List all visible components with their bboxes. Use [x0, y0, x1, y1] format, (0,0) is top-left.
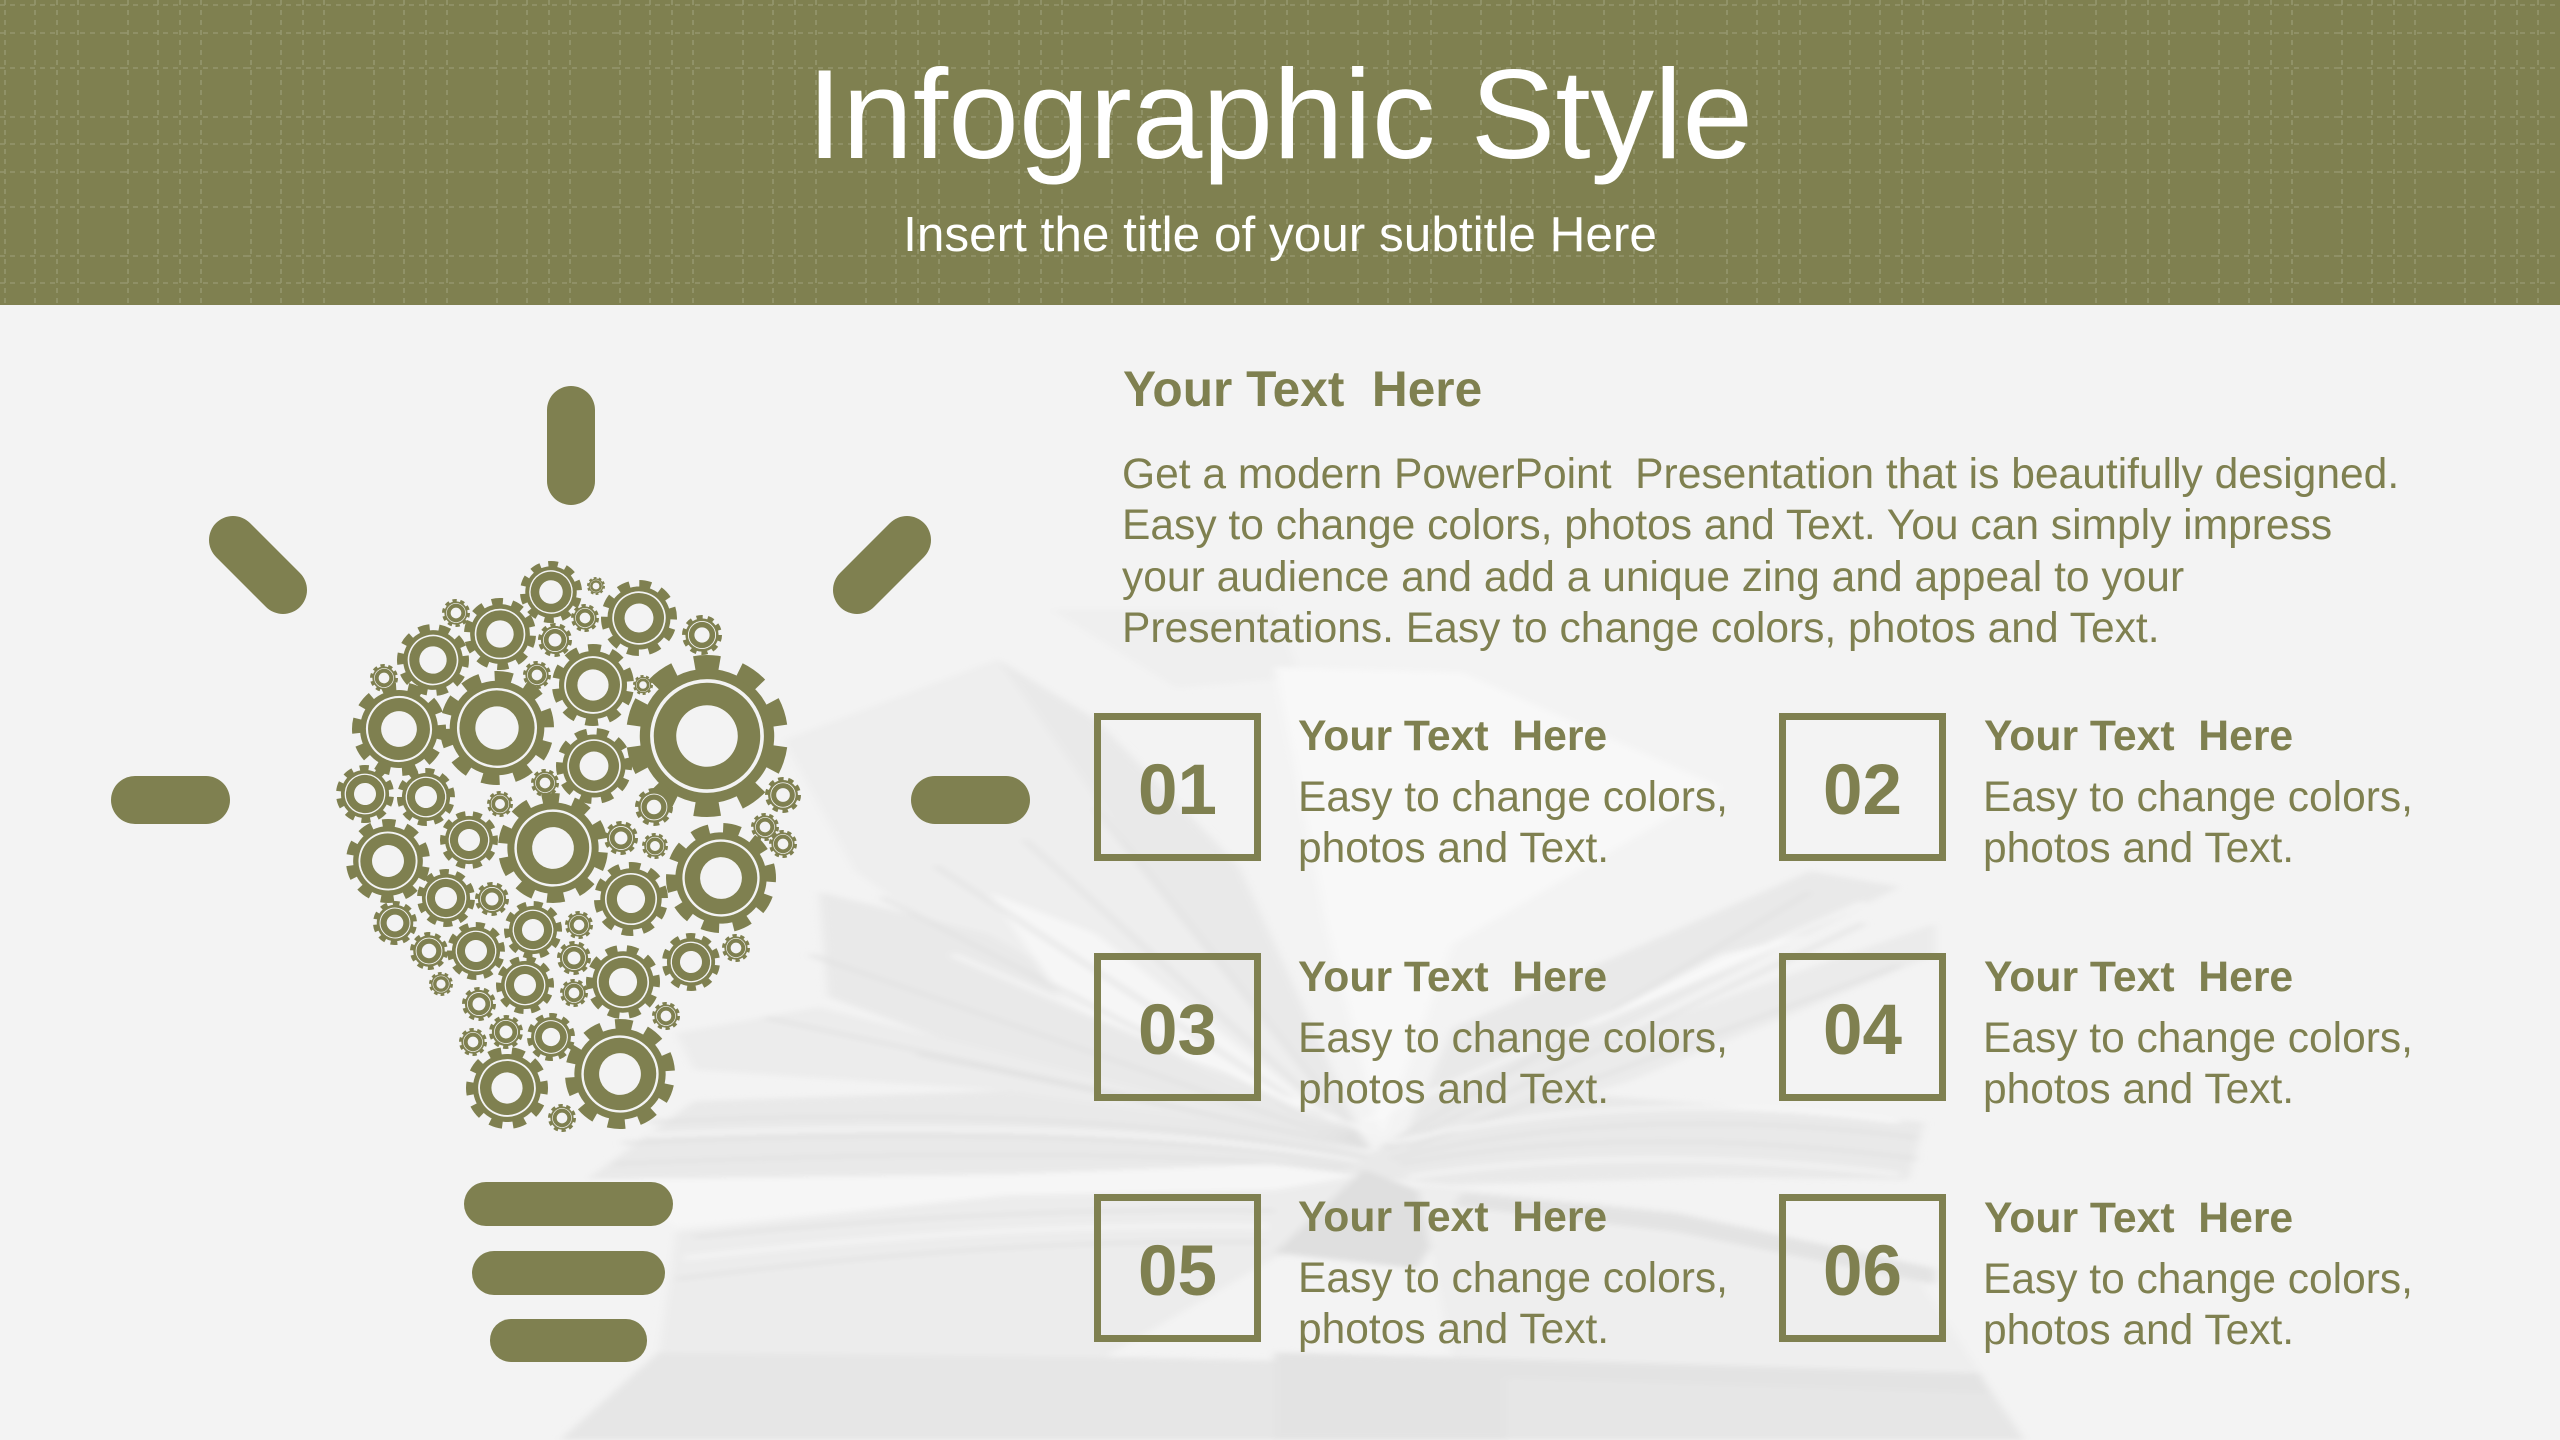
subtitle: Insert the title of your subtitle Here — [903, 207, 1657, 262]
item 06 heading: Your Text Here — [1984, 1194, 2293, 1242]
item 02 heading: Your Text Here — [1984, 712, 2293, 760]
item 05 heading: Your Text Here — [1298, 1193, 1607, 1241]
item 05 text: Easy to change colors, photos and Text. — [1298, 1255, 1728, 1353]
item 04 heading: Your Text Here — [1984, 953, 2293, 1001]
icon: light rays — [135, 410, 1006, 800]
item 03 text: Easy to change colors, photos and Text. — [1298, 1015, 1728, 1113]
item 04 — [1779, 953, 2413, 1113]
item 04 text: Easy to change colors, photos and Text. — [1983, 1015, 2413, 1113]
main body text: Get a modern PowerPoint Presentation that is beautifully designed. Easy to change colors, photos and Text. You can simply impress your audience and add a unique zing and appeal to your Presentations. Easy to change colors, photos and Text. — [1122, 450, 2399, 652]
item 01 text: Easy to change colors, photos and Text. — [1298, 774, 1728, 872]
number box 03 — [1094, 953, 1261, 1101]
header band — [0, 0, 2560, 305]
number box 06: 06 — [1823, 1232, 1902, 1311]
item 06 — [1779, 1194, 2413, 1354]
number box 02: 02 — [1823, 751, 1902, 830]
item 06 text: Easy to change colors, photos and Text. — [1983, 1256, 2413, 1354]
number box 03: 03 — [1138, 991, 1217, 1070]
item 03 — [1094, 953, 1728, 1113]
item 01 heading: Your Text Here — [1298, 712, 1607, 760]
number box 05 — [1094, 1194, 1261, 1342]
number box 01: 01 — [1138, 751, 1217, 830]
main heading: Your Text Here — [1123, 361, 1482, 417]
number box 04 — [1779, 953, 1946, 1101]
item 05 — [1094, 1193, 1728, 1353]
title: Infographic Style — [807, 43, 1753, 185]
item 02 text: Easy to change colors, photos and Text. — [1983, 774, 2413, 872]
item 03 heading: Your Text Here — [1298, 953, 1607, 1001]
number box 05: 05 — [1138, 1232, 1217, 1311]
number box 01 — [1094, 713, 1261, 861]
icon: bulb base bars — [464, 1182, 673, 1362]
item 01 — [1094, 712, 1728, 872]
number box 06 — [1779, 1194, 1946, 1342]
number box 02 — [1779, 713, 1946, 861]
number box 04: 04 — [1823, 991, 1902, 1070]
icon: gears cluster — [336, 559, 799, 1137]
item 02 — [1779, 712, 2413, 872]
